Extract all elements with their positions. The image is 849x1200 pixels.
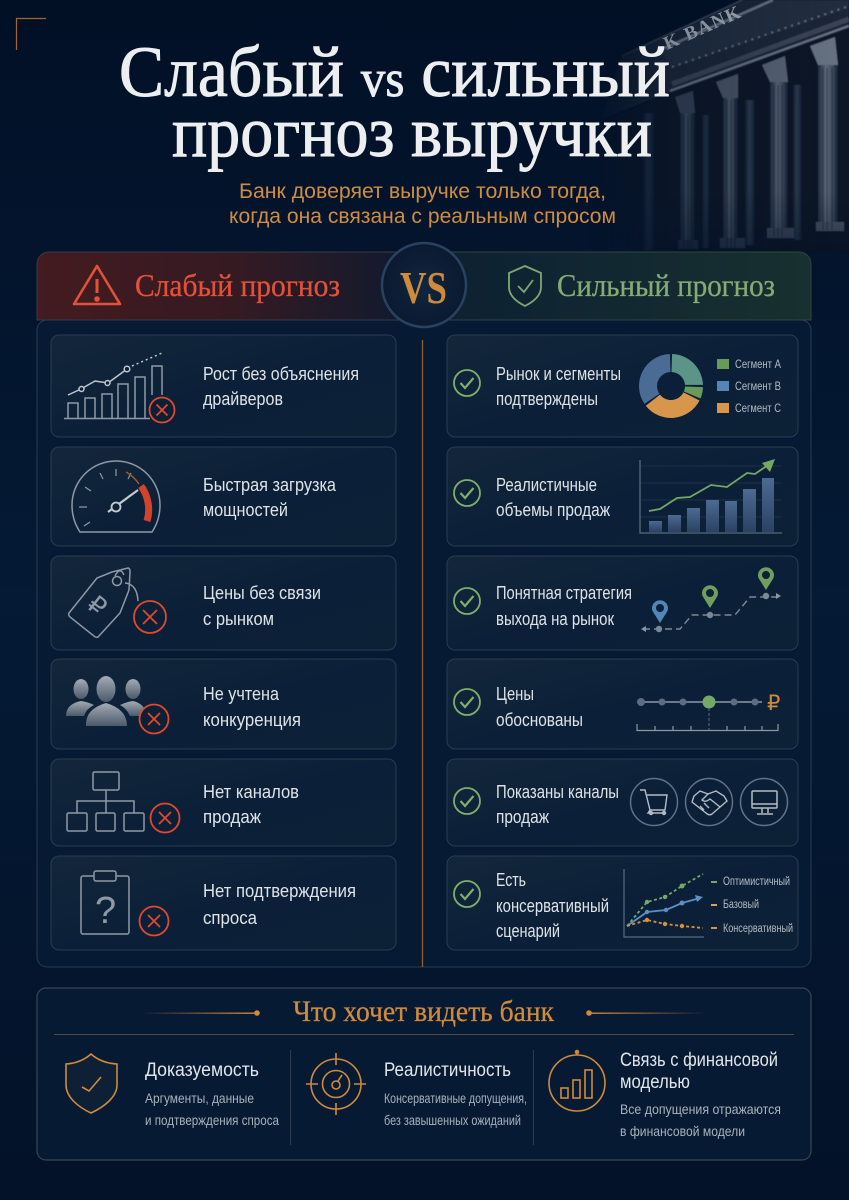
card text: продаж [203,807,261,827]
item: link to financial model: Все допущения отражаются [620,1101,781,1117]
card text [496,684,583,730]
icon: clipboard question [81,871,129,934]
card text: сценарий [496,921,560,941]
VS badge [382,243,466,327]
card text: Нет подтверждения [203,881,356,901]
item: realism: без завышенных ожиданий [384,1112,521,1128]
title: Слабый vs сильный [119,32,670,112]
item: provability: и подтверждения спроса [145,1112,279,1128]
icon: red cross [150,804,180,832]
card: no sales channels [51,759,396,846]
icon: price tag [69,568,138,637]
card text: мощностей [203,500,288,520]
card: fast capacity ramp-up [51,447,396,546]
card: prices justified [447,659,798,749]
donut chart [639,354,703,418]
card text: Не учтена [203,684,280,704]
section heading: Что хочет видеть банк [293,995,554,1028]
header: strong forecast: Сильный прогноз [557,267,775,303]
icon: hierarchy [67,772,144,831]
card text [496,475,610,520]
icon: green shield [509,266,541,306]
card text [203,881,356,928]
card text [496,583,632,629]
card: no demand proof [51,856,396,950]
scenario legend: Базовый [723,899,759,911]
scenario legend: Оптимистичный [723,876,790,888]
corner accent [16,18,46,50]
price scale [637,692,780,730]
bank building illustration [622,0,849,250]
card text [203,583,321,629]
panel: what the bank wants [37,988,811,1160]
title [119,32,670,172]
card text: Быстрая загрузка [203,475,337,495]
card: conservative scenario [447,856,798,950]
card text [203,684,301,730]
card text: обоснованы [496,710,583,730]
scenario legend: Консервативный [723,923,793,935]
item: link to financial model [549,1050,781,1139]
icon: warning triangle [74,266,120,304]
icon: clipboard question: ? [95,890,116,932]
donut legend: Сегмент C [735,403,781,415]
card text: Нет каналов [203,782,299,802]
card: growth without drivers [51,335,396,437]
card text: подтверждены [496,389,598,409]
item: provability: Доказуемость [145,1060,259,1081]
card text: консервативный [496,896,609,916]
donut legend: Сегмент A [735,359,781,371]
card text: Цены [496,684,534,704]
card: sales channels shown [447,759,798,846]
card: market and segments [447,335,798,437]
card: prices without market link [51,556,396,650]
item: realism: Реалистичность [384,1060,511,1081]
card text: выхода на рынок [496,609,614,629]
card text: Показаны каналы [496,782,619,802]
card text: Реалистичные [496,475,597,495]
item: provability: Аргументы, данные [145,1090,254,1106]
icon: check [454,588,480,614]
item: realism: Консервативные допущения, [384,1090,527,1106]
card text: Понятная стратегия [496,583,632,603]
item: realism [306,1053,527,1128]
icon: orange shield [66,1054,117,1113]
donut legend: Сегмент B [735,381,781,393]
route with pins [641,567,781,632]
header: weak forecast: Слабый прогноз [135,267,340,303]
icon: check [454,788,480,814]
sales chart [640,459,782,533]
icon: bars in circle [549,1050,605,1111]
comparison panel [37,320,811,967]
VS badge: VS [400,262,447,313]
icon: red cross [134,601,166,633]
item: link to financial model: в финансовой модели [620,1123,745,1139]
card text: продаж [496,807,549,827]
bank building illustration: K BANK [660,1,745,55]
icon: growth chart [64,353,162,418]
icon: red cross [150,398,174,422]
icon: price tag: ₽ [82,590,112,622]
section heading [140,995,707,1028]
icon: check [454,480,480,506]
card text: объемы продаж [496,500,610,520]
subtitle: когда она связана с реальным спросом [229,204,616,228]
card: competition ignored [51,659,396,749]
icon: check [454,881,480,907]
item: link to financial model: Связь с финансовой [620,1050,778,1071]
icon: check [454,689,480,715]
icon: monitor [740,778,788,826]
icon: red cross [140,704,168,734]
card text: драйверов [203,389,283,409]
header: strong forecast [424,252,811,320]
icon: people [66,676,146,726]
card text: Есть [496,870,526,890]
card text [203,364,359,409]
title: прогноз выручки [172,92,652,172]
scenario chart [624,869,704,937]
card: realistic sales [447,447,798,546]
header: weak forecast [37,252,424,320]
icon: cart [630,778,678,826]
icon: target [306,1053,366,1115]
card text: Рост без объяснения [203,364,359,384]
subtitle [229,179,616,228]
icon: red cross [140,906,168,936]
subtitle: Банк доверяет выручке только тогда, [239,179,606,203]
icon: check [454,370,480,396]
card text: конкуренция [203,710,301,730]
card text [496,364,621,409]
card text: спроса [203,908,258,928]
scenario legend [711,876,793,935]
icon: handshake [686,778,732,826]
card text [496,782,619,827]
card text: Цены без связи [203,583,321,603]
card text [203,475,337,520]
card text [496,870,609,941]
card: market entry strategy [447,556,798,650]
item: link to financial model: моделью [620,1072,690,1093]
item: provability [66,1054,279,1128]
price scale: ₽ [767,692,780,715]
card text: Рынок и сегменты [496,364,621,384]
card text: с рынком [203,609,274,629]
donut legend [717,359,781,415]
icon: gauge [72,461,160,532]
card text [203,782,299,827]
